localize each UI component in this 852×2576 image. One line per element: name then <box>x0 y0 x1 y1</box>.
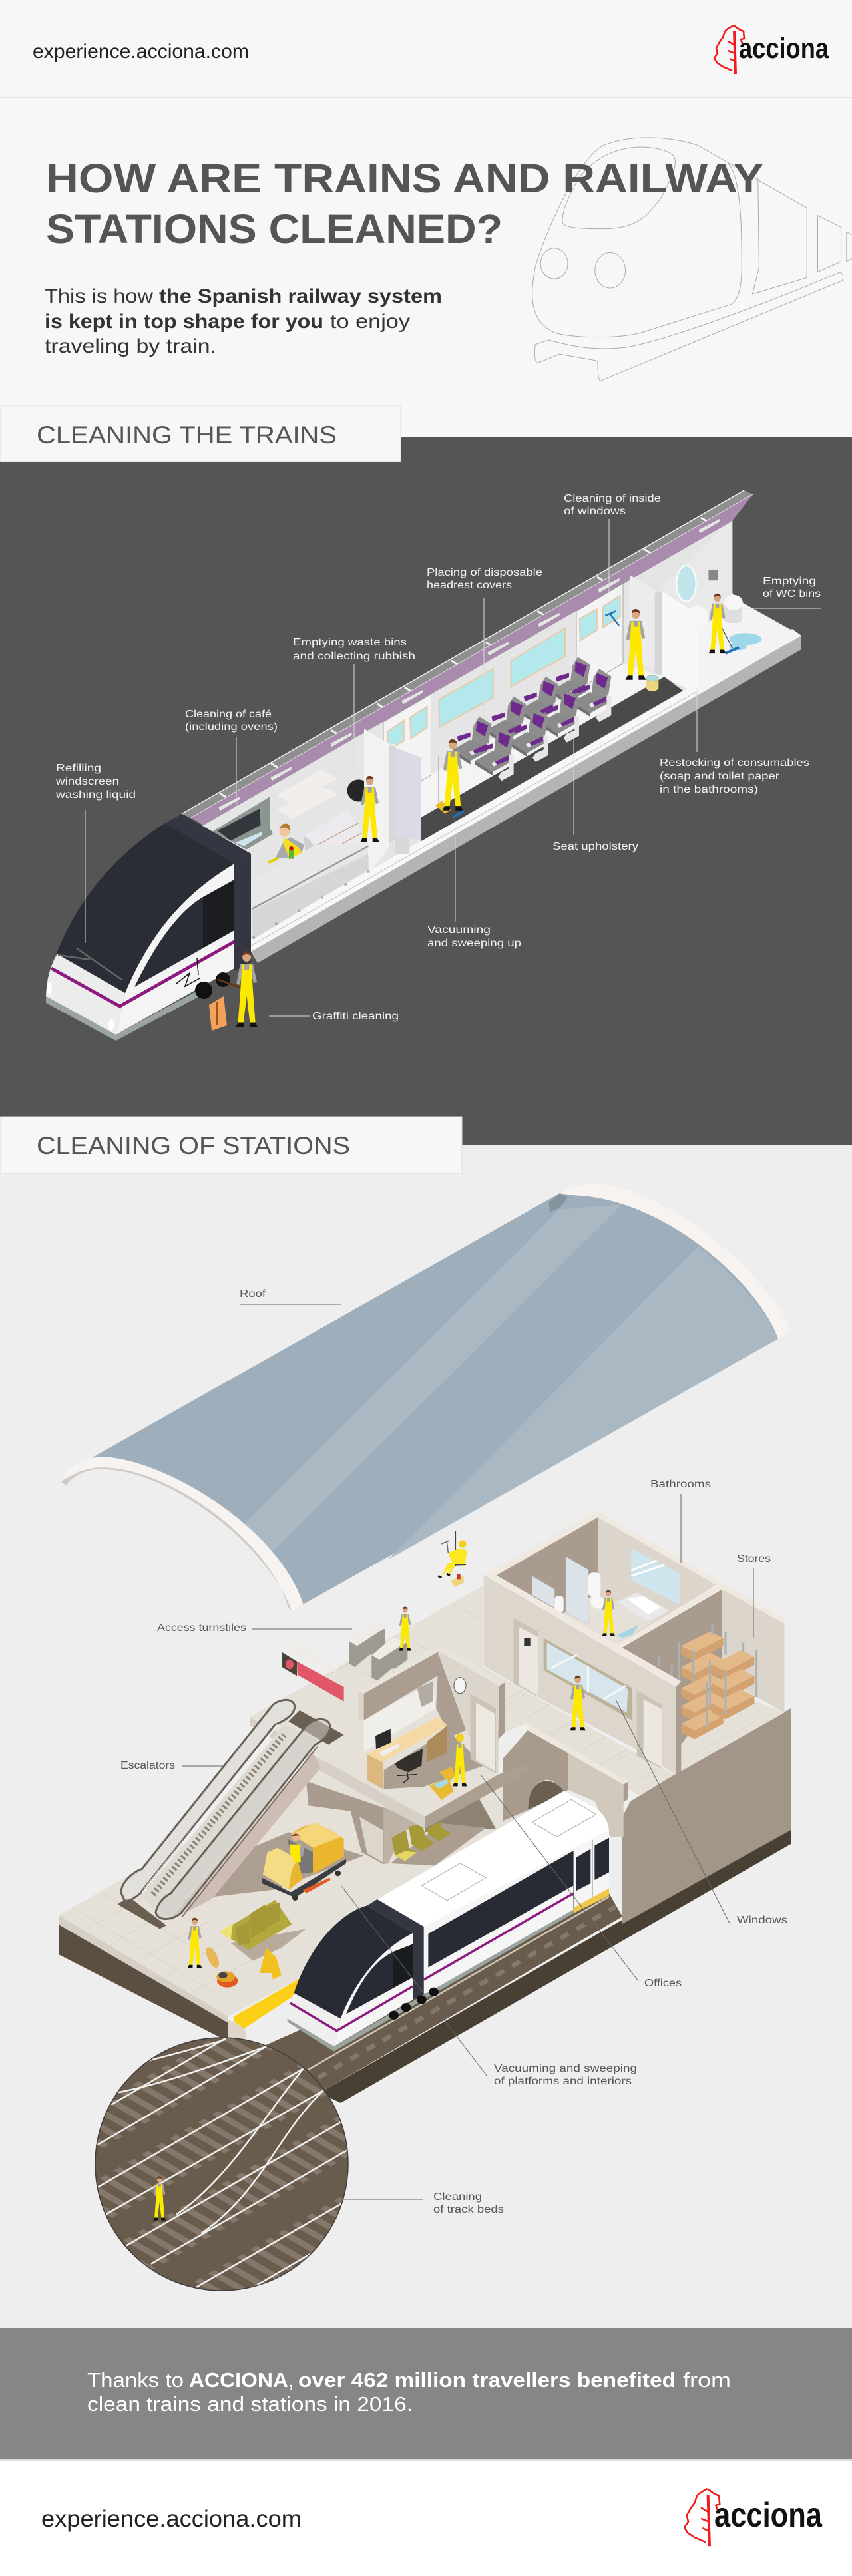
label: cafe: Cleaning of café <box>185 709 272 720</box>
label: headrest covers: Placing of disposable <box>427 567 542 578</box>
label: headrest covers: headrest covers <box>427 580 512 591</box>
left pier <box>358 1692 364 1720</box>
machine <box>262 1822 346 1901</box>
cubicles <box>532 1557 588 1625</box>
rim shadow <box>548 1193 568 1212</box>
worker: WC <box>709 594 726 653</box>
turnstile 2 <box>371 1638 407 1681</box>
label: vacuuming <box>427 837 521 949</box>
shelving <box>659 1624 757 1739</box>
WC floor <box>688 604 801 693</box>
illustration: roof <box>61 1183 791 1611</box>
divider rim <box>616 1585 722 1648</box>
header logo <box>714 25 829 74</box>
track bed <box>263 1893 622 2093</box>
label: restocking: Restocking of consumables <box>660 757 809 769</box>
heading: cleaning of stations: CLEANING OF STATIONS <box>37 1132 350 1159</box>
oven <box>212 797 273 850</box>
interior wall and floor <box>200 521 801 952</box>
turnstile 1 <box>349 1624 385 1667</box>
footer logo <box>684 2489 823 2546</box>
floor polisher <box>204 1945 238 1988</box>
yellow strip <box>574 1888 609 1913</box>
label: restocking: (soap and toilet paper <box>660 771 779 782</box>
office interior wall <box>364 1682 436 1752</box>
label: windscreen liquid: washing liquid <box>55 789 136 801</box>
rope worker <box>438 1531 467 1587</box>
nose side window <box>346 1944 413 2014</box>
arch wall <box>503 1730 568 1821</box>
passenger floor <box>395 663 664 817</box>
platform edge <box>59 1915 228 2023</box>
steps <box>141 1725 318 1915</box>
labels: train <box>55 493 821 1022</box>
label: WC bins: Emptying <box>763 576 816 587</box>
platform end <box>228 2020 246 2042</box>
label: bathrooms: Bathrooms <box>650 1479 711 1490</box>
arch opening <box>528 1781 564 1810</box>
closing text: clean trains and stations in 2016. <box>87 2392 413 2416</box>
intro text: is kept in top shape for you <box>45 311 323 333</box>
worker: windows <box>626 609 646 680</box>
ties <box>97 2038 347 2291</box>
label: restocking: in the bathrooms) <box>660 784 758 795</box>
label: offices: Offices <box>644 1978 682 1989</box>
front face <box>46 954 125 1035</box>
workers in station <box>188 1590 615 1968</box>
lower area crop E <box>72 1832 364 2028</box>
clock <box>454 1678 466 1694</box>
driver <box>290 1833 304 1862</box>
cafe detail <box>212 769 368 940</box>
label: WC bins <box>747 576 821 608</box>
glass roof <box>93 1193 778 1605</box>
bathroom floor <box>559 1602 670 1646</box>
label: headrest covers <box>427 567 542 718</box>
under-office crop F <box>306 1781 496 1865</box>
bench shadow <box>231 1929 306 1961</box>
closing text: from <box>683 2368 731 2392</box>
benches <box>391 1821 451 1861</box>
display case <box>304 810 368 865</box>
purple stripe <box>51 942 234 1006</box>
desk <box>367 1716 447 1789</box>
label: WC bins: of WC bins <box>763 588 821 600</box>
worker: graffiti <box>236 951 258 1027</box>
low wall rim <box>358 1645 505 1694</box>
label: track beds: of track beds <box>433 2204 504 2215</box>
block door panel <box>359 1817 383 1862</box>
dark roof <box>57 823 234 993</box>
label: waste bins: and collecting rubbish <box>293 651 415 662</box>
office crop C <box>282 1531 528 1829</box>
worker: window <box>570 1676 586 1730</box>
door windows <box>576 1838 609 1891</box>
inner rails <box>142 1725 315 1915</box>
bathroom glass <box>631 1549 680 1605</box>
balustrade right <box>156 1719 330 1919</box>
skirt <box>288 1909 574 2052</box>
closing text: Thanks to <box>87 2368 184 2392</box>
headlights <box>47 982 114 1031</box>
footer url: experience.acciona.com <box>41 2506 302 2532</box>
left door panels <box>383 694 431 795</box>
label: vacuuming platforms: Vacuuming and sweeping <box>494 2063 637 2074</box>
title: HOW ARE TRAINS AND RAILWAY <box>46 156 763 201</box>
labels: station <box>120 1288 787 2215</box>
worker: office <box>453 1734 467 1786</box>
block right face <box>384 1807 425 1865</box>
illustration: station <box>59 1510 791 2103</box>
stores door <box>637 1690 662 1769</box>
mid carriage detail <box>383 584 658 817</box>
label: graffiti: Graffiti cleaning <box>312 1011 399 1022</box>
wall end <box>498 1682 505 1739</box>
escalator base patches <box>118 1897 166 1929</box>
upper building crop D <box>484 1510 785 1837</box>
intro text: the Spanish railway system <box>159 285 442 307</box>
intro text: This is how <box>45 285 153 307</box>
panel: cleaning of stations background <box>0 1145 852 2328</box>
side window <box>134 880 234 987</box>
worker: vacuum <box>443 739 463 811</box>
entrance sign <box>282 1642 344 1702</box>
escalator support <box>168 1752 321 1921</box>
end cap <box>165 814 251 864</box>
floor shade <box>384 1730 484 1789</box>
mop <box>720 625 739 653</box>
label: roof: Roof <box>240 1288 266 1300</box>
illustration: train cutaway <box>46 490 801 1041</box>
train roof <box>377 1791 609 1927</box>
label: windows <box>616 1700 787 1926</box>
toilets <box>554 1572 605 1612</box>
building top rim <box>484 1510 785 1682</box>
track rail and ties <box>308 1897 616 2078</box>
side <box>116 864 234 1035</box>
rubbish bags <box>347 779 393 829</box>
title: STATIONS CLEANED? <box>46 206 503 252</box>
second room dark wall again <box>621 1589 722 1748</box>
heading: cleaning the trains: CLEANING THE TRAINS <box>37 421 337 449</box>
label: windscreen liquid <box>55 763 136 943</box>
worker: turnstiles <box>399 1607 411 1651</box>
closing text <box>87 2368 731 2416</box>
track bed circle <box>95 2037 349 2291</box>
platform side <box>59 1925 228 2042</box>
dark recess <box>425 1789 496 1832</box>
closing text: over 462 million travellers benefited <box>298 2368 676 2392</box>
counter feet <box>254 870 368 939</box>
recess floor <box>391 1823 486 1865</box>
chair <box>395 1749 423 1783</box>
end panel <box>413 1927 424 2000</box>
aisle <box>421 677 683 841</box>
window <box>544 1638 632 1720</box>
graffiti <box>176 958 200 986</box>
label: cafe <box>185 709 278 810</box>
door lines <box>574 1840 592 1910</box>
waste bin <box>395 828 409 854</box>
water puddle <box>729 633 761 650</box>
right end: WC <box>347 520 801 854</box>
toilet door <box>514 1618 538 1697</box>
second room back walls <box>621 1589 722 1748</box>
second room floor again <box>681 1688 784 1771</box>
zigzag <box>153 1735 284 1895</box>
label: vacuuming: Vacuuming <box>427 924 491 936</box>
office door <box>471 1694 496 1773</box>
pressure washer <box>209 980 252 1031</box>
floor tile lines <box>506 1688 754 1781</box>
label: vacuuming platforms: of platforms and interiors <box>494 2076 632 2087</box>
upper floor <box>250 1586 674 1823</box>
label: vacuuming: and sweeping up <box>427 938 521 949</box>
worker: cafe <box>268 824 304 862</box>
puddle <box>618 1625 639 1638</box>
header logo: acciona <box>739 33 829 65</box>
footer logo: acciona <box>714 2496 823 2535</box>
low wall <box>358 1652 439 1720</box>
closing band <box>0 2328 852 2461</box>
balustrade left <box>121 1700 295 1901</box>
bucket <box>646 675 658 691</box>
wall plate <box>708 570 718 580</box>
bathroom dark wall <box>497 1517 598 1628</box>
windows <box>387 596 620 750</box>
worker: polisher <box>188 1918 202 1968</box>
label: cleaning of inside of windows <box>564 493 661 593</box>
nose front <box>288 1993 341 2046</box>
icon: train outline <box>532 138 852 381</box>
wipers <box>58 948 122 980</box>
label: track beds <box>343 2191 504 2215</box>
skirt <box>46 990 198 1041</box>
train crop F <box>288 1791 609 2052</box>
bathroom light wall <box>598 1517 716 1646</box>
nose stripes <box>290 1986 413 2031</box>
header bar <box>0 25 852 98</box>
heading: cleaning the trains <box>0 405 401 462</box>
front wall rim <box>484 1575 681 1687</box>
end panel <box>234 854 251 971</box>
office side wall <box>439 1652 499 1775</box>
label: offices <box>481 1775 682 1989</box>
track bed side <box>320 1830 791 2103</box>
intro text: traveling by train. <box>45 335 216 357</box>
front rim <box>61 1457 303 1611</box>
train base <box>251 636 801 963</box>
seats <box>453 657 611 781</box>
purple stripe <box>424 1893 574 1980</box>
sink <box>618 1592 669 1622</box>
arch pillar <box>568 1752 624 1837</box>
train windows <box>428 1851 574 1968</box>
walkway rim <box>528 1724 628 1785</box>
workers in train <box>236 594 726 1027</box>
label: cleaning of inside of windows: of windows <box>564 506 626 517</box>
upper slab side <box>250 1717 313 1762</box>
label: windscreen liquid: Refilling <box>56 763 101 774</box>
worker: track <box>153 2177 166 2221</box>
purple frieze <box>191 494 753 825</box>
label: restocking <box>660 687 809 795</box>
footer <box>0 2461 852 2576</box>
wheels <box>389 1988 439 2020</box>
building side wall <box>622 1708 791 1924</box>
label: stores <box>737 1553 771 1638</box>
upper tile lines <box>313 1604 626 1773</box>
intro text <box>45 285 442 357</box>
office floor <box>318 1717 498 1817</box>
label: windows: Windows <box>737 1915 787 1926</box>
nose side <box>334 1933 413 2046</box>
office slab left face <box>313 1755 425 1829</box>
second room floor <box>681 1688 784 1771</box>
wheels <box>195 972 230 999</box>
intro text: to enjoy <box>330 311 410 333</box>
heading: cleaning of stations <box>0 1117 462 1173</box>
wet floor sign <box>260 1948 282 1980</box>
side wall shadow <box>436 1655 466 1737</box>
office slab right face <box>425 1765 528 1829</box>
roof light stripes <box>244 1204 778 1559</box>
platform tile lines <box>72 1872 275 2001</box>
label: windscreen liquid: windscreen <box>55 776 119 787</box>
panel: cleaning the trains background <box>0 437 852 1145</box>
title <box>46 156 763 252</box>
train nose <box>46 814 251 1041</box>
second room back wall again <box>722 1589 784 1712</box>
top patch <box>288 1710 344 1745</box>
benches <box>220 1900 292 1950</box>
ceiling lights <box>218 518 720 811</box>
WC back wall <box>660 520 732 630</box>
label: cleaning of inside of windows: Cleaning of inside <box>564 493 661 504</box>
label: access turnstiles: Access turnstiles <box>157 1622 246 1634</box>
escalators crop E <box>121 1700 346 1988</box>
squeegee <box>605 611 619 626</box>
closing text: ACCIONA <box>189 2368 288 2392</box>
header url: experience.acciona.com <box>33 41 249 63</box>
front wall <box>484 1575 676 1775</box>
floor edge strip <box>251 629 801 952</box>
label: stores: Stores <box>737 1553 771 1564</box>
label: track beds: Cleaning <box>433 2191 482 2203</box>
label: waste bins: Emptying waste bins <box>293 637 407 648</box>
label: cafe: (including ovens) <box>185 721 278 733</box>
roof strip <box>182 490 753 818</box>
dustpan and broom <box>435 757 464 817</box>
yellow edge <box>234 1978 300 2028</box>
lower floor <box>59 1767 564 2016</box>
mirror <box>676 566 696 601</box>
partition <box>630 576 698 691</box>
label: vacuuming platforms <box>341 1886 637 2087</box>
worker: bathroom <box>602 1590 615 1636</box>
worker: bins <box>360 776 379 842</box>
counter <box>251 843 368 940</box>
label: escalators: Escalators <box>120 1760 175 1771</box>
back rim <box>560 1183 791 1339</box>
closing text: , <box>288 2368 294 2392</box>
train side <box>424 1830 609 1994</box>
shadow floor <box>214 1832 364 1897</box>
end cap <box>367 1899 424 1933</box>
rails <box>98 2038 347 2287</box>
right door panels <box>576 584 623 690</box>
block left face <box>306 1781 384 1865</box>
front wall end <box>676 1682 681 1775</box>
label: waste bins <box>293 637 415 773</box>
cafe partition <box>364 729 421 873</box>
nose dark <box>294 1905 413 2018</box>
back pillar <box>417 1682 433 1707</box>
shelves <box>277 769 337 819</box>
toilet and sink <box>686 595 743 630</box>
label: bathrooms <box>650 1479 711 1563</box>
trolley <box>429 1767 456 1800</box>
label: seat upholstery: Seat upholstery <box>552 841 638 852</box>
